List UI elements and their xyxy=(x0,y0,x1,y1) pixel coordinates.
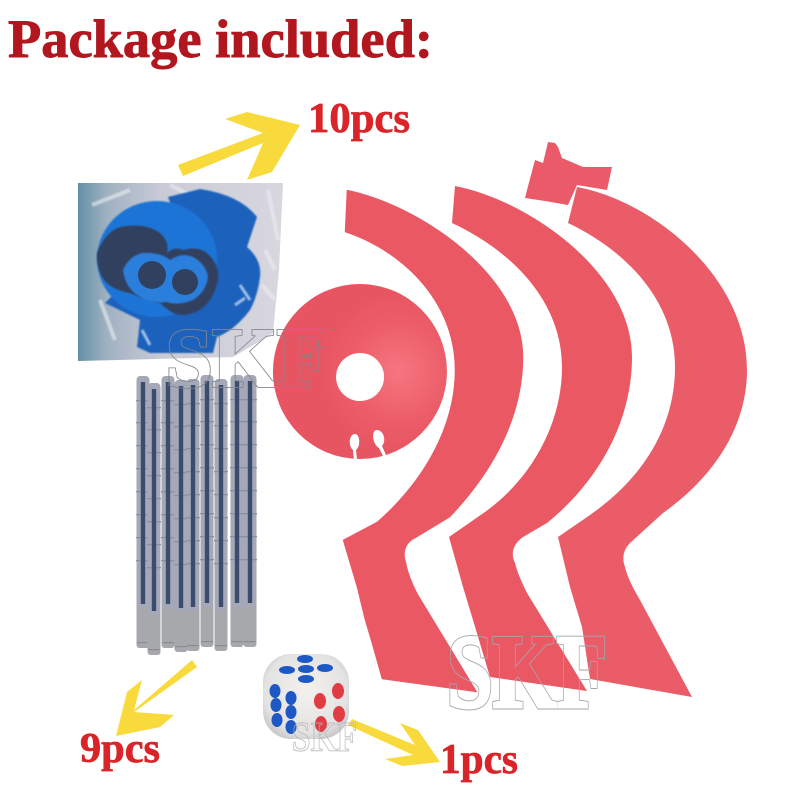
disc slot left xyxy=(350,434,359,460)
icon: balloon bag xyxy=(78,183,283,361)
balloon right eye xyxy=(172,269,198,295)
balloon left eye xyxy=(138,261,166,289)
balloon eye ring xyxy=(123,253,208,304)
balloon dark face xyxy=(97,225,218,315)
icon: curved track piece 2 xyxy=(449,186,632,691)
bag creases xyxy=(92,185,278,340)
label: 10pcs: 10pcs xyxy=(308,95,410,142)
arrow: rods to 9pcs xyxy=(116,660,197,736)
die top pips xyxy=(279,655,333,683)
arrow: die to 1pcs xyxy=(348,719,440,766)
label: 9pcs: 9pcs xyxy=(80,725,160,772)
icon: grey rods xyxy=(136,375,257,655)
icon: die xyxy=(263,654,349,739)
deflated balloons xyxy=(105,189,260,353)
die body xyxy=(263,654,349,739)
watermark: tracks: SKF xyxy=(447,613,607,730)
icon: curved track piece 1 xyxy=(343,190,523,692)
balloon head xyxy=(97,201,217,317)
disc slot right xyxy=(373,430,386,456)
watermark: bag: SKF xyxy=(166,312,328,405)
icon: curved track piece 3 xyxy=(558,187,747,697)
icon: disc xyxy=(273,284,447,460)
watermark: die: SKF xyxy=(292,715,357,761)
arrow: balloons to 10pcs xyxy=(178,112,300,180)
plastic bag xyxy=(78,183,283,361)
icon: track connector clip xyxy=(525,142,612,205)
title: Package included: xyxy=(8,9,433,69)
label: 1pcs: 1pcs xyxy=(440,736,518,783)
die left pips xyxy=(270,684,296,734)
balloon highlights xyxy=(142,285,250,345)
die right pips xyxy=(314,683,345,732)
